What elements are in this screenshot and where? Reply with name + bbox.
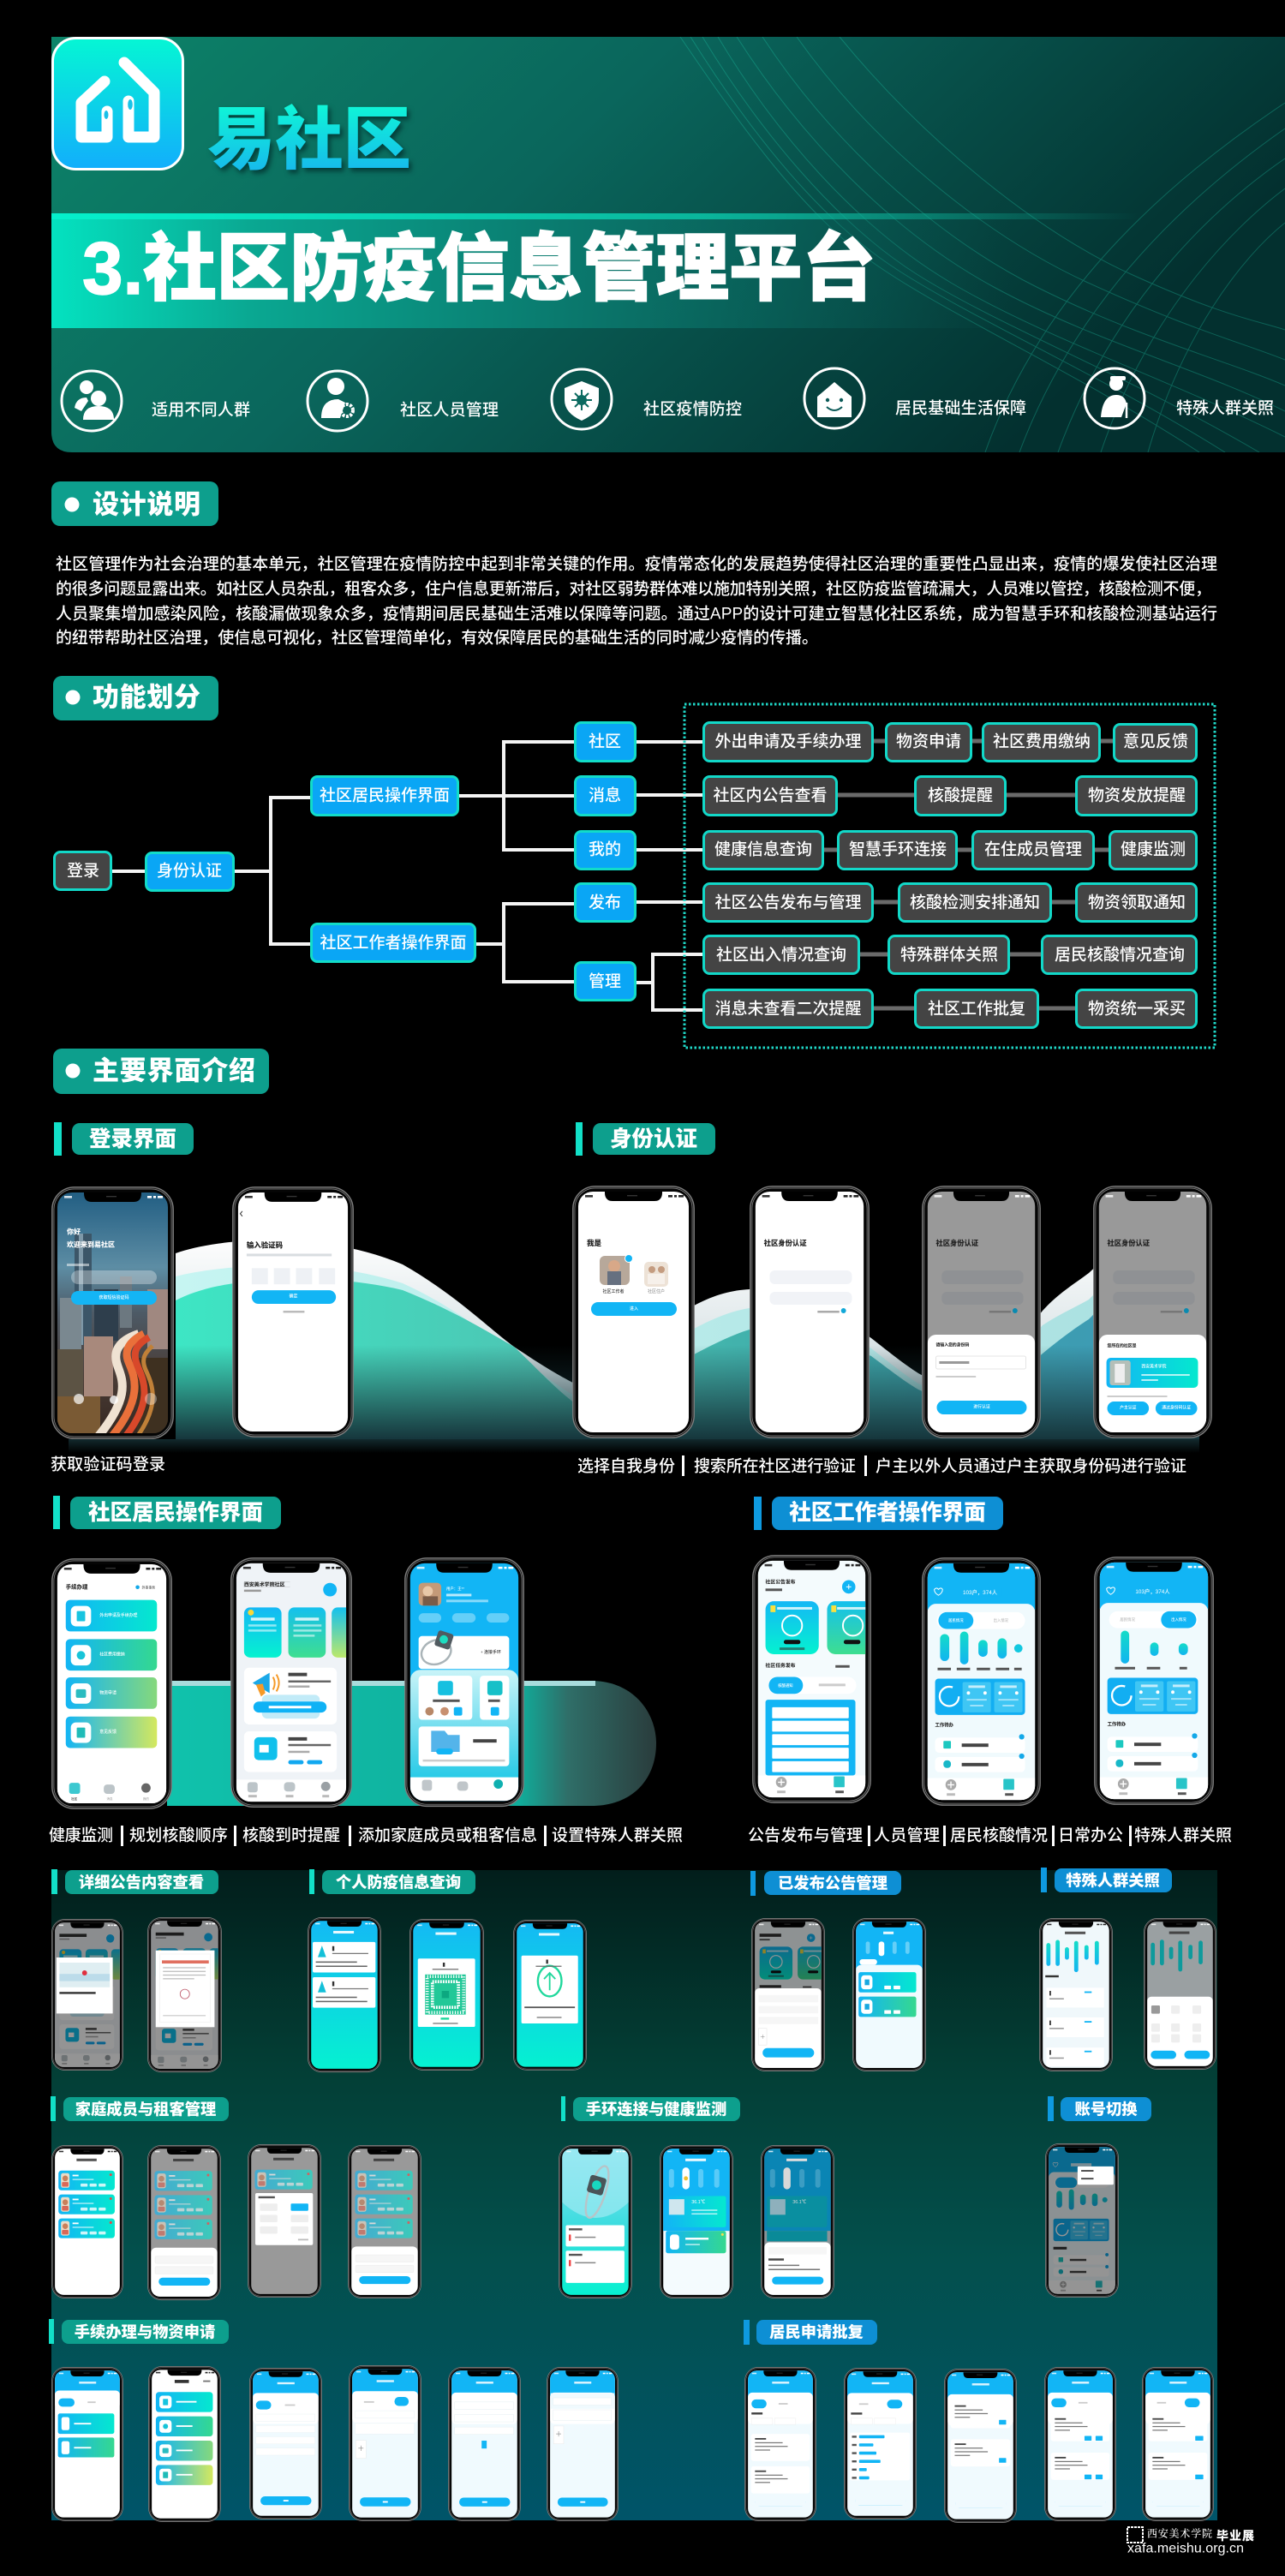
caption: resident features: 添加家庭成员或租客信息 xyxy=(358,1826,537,1845)
leaf row 5: 居民核酸情况查询 xyxy=(1055,946,1185,965)
caption: login: 获取验证码登录 xyxy=(51,1455,165,1473)
phone: access stats: 工作待办 xyxy=(1108,1721,1127,1728)
node: community xyxy=(576,723,636,761)
phone: approval list xyxy=(744,2367,816,2521)
hero banner xyxy=(51,37,1285,452)
phone: travel card xyxy=(513,1920,587,2071)
caption: worker features xyxy=(748,1826,1232,1846)
subheading: identity xyxy=(576,1122,715,1156)
phone: publish: 社区任务发布 xyxy=(766,1662,796,1669)
phone: verification code xyxy=(232,1186,354,1437)
feature: epidemic control xyxy=(552,369,742,429)
resident band background xyxy=(167,1681,656,1806)
phone: application types xyxy=(51,2367,123,2521)
subheading: resident interface: 社区居民操作界面 xyxy=(88,1500,263,1525)
node: identity verification xyxy=(146,853,233,891)
phone: identity code sheet: 进行认证 xyxy=(973,1403,990,1410)
phone: residents stats: 居民情况 xyxy=(948,1617,964,1623)
phone: procedures list: 手续办理 xyxy=(66,1582,88,1590)
phone: bracelet connect xyxy=(559,2145,632,2298)
caption: resident features: 核酸到时提醒 xyxy=(242,1826,340,1845)
design description paragraph xyxy=(56,555,1217,648)
dotted leaf frame xyxy=(684,704,1215,1048)
phone: access stats xyxy=(1094,1557,1214,1805)
phone: my profile: + 连接手环 xyxy=(481,1649,501,1655)
heading: function division: 功能划分 xyxy=(93,682,200,713)
phone: my profile xyxy=(404,1557,524,1807)
phone: procedures list: 意见反馈 xyxy=(99,1729,117,1735)
lower panel background xyxy=(51,1870,1217,2520)
leaf row 3: 健康监测 xyxy=(1121,840,1186,858)
caption: worker features: 特殊人群关照 xyxy=(1134,1826,1232,1845)
leaf row 4: 核酸检测安排通知 xyxy=(910,893,1040,911)
phone: QR code xyxy=(409,1919,484,2071)
leaf row 1 xyxy=(704,723,1196,761)
leaf row 1: 物资申请 xyxy=(896,732,961,750)
phone: role selection: 社区工作者 xyxy=(602,1288,625,1294)
grey connectors between leaf nodes xyxy=(824,741,1113,1008)
node: manage xyxy=(576,963,636,1001)
design description paragraph: 的纽带帮助社区治理，使信息可视化，社区管理简单化，有效保障居民的基础生活的同时减少疫情的传播。 xyxy=(56,629,818,648)
phone: role selection xyxy=(572,1186,695,1438)
node: login xyxy=(55,852,111,889)
phone: access stats: 居民情况 xyxy=(1120,1617,1136,1623)
watermark: 毕业展 xyxy=(1216,2529,1254,2543)
subheading: notice details xyxy=(51,1869,218,1894)
feature: special groups: 特殊人群关照 xyxy=(1176,399,1274,418)
phone: procedures list xyxy=(51,1558,172,1809)
design description paragraph: 的很多问题显露出来。如社区人员杂乱，租客众多，住户信息更新滞后，对社区弱势群体难以施加特别关照，社区防疫监管疏漏大，人员难以管控，核酸检测不便， xyxy=(56,579,1211,598)
leaf row 5 xyxy=(704,935,1196,973)
phone: notice document popup xyxy=(147,1917,225,2072)
node: identity verification: 身份认证 xyxy=(157,862,222,881)
leaf row 4: 物资领取通知 xyxy=(1088,893,1186,911)
leaf row 6: 消息未查看二次提醒 xyxy=(714,999,862,1018)
leaf row 5: 社区出入情况查询 xyxy=(716,946,846,965)
phone: community result sheet: 西安美术学院 xyxy=(1141,1363,1167,1370)
subheading: special care xyxy=(1041,1868,1172,1892)
leaf row 6: 社区工作批复 xyxy=(928,999,1025,1018)
phone: upload form xyxy=(349,2365,421,2521)
phone: publish form sheet xyxy=(751,1918,828,2071)
subheading: special care: 特殊人群关照 xyxy=(1066,1871,1160,1890)
node: community: 社区 xyxy=(589,732,621,750)
phone: procedures list: 外事事务 xyxy=(142,1585,155,1589)
subheading: identity: 身份认证 xyxy=(610,1127,697,1151)
leaf row 1: 意见反馈 xyxy=(1123,732,1188,750)
phone: procedures list: 物资申请 xyxy=(99,1689,117,1695)
leaf row 3 xyxy=(704,831,1196,869)
phone: community result sheet: 户主认证 xyxy=(1120,1404,1137,1411)
phone: my profile: 用户：王** xyxy=(446,1586,464,1592)
subheading: notice details: 详细公告内容查看 xyxy=(79,1873,204,1892)
phone: publish: 社区公告发布 xyxy=(766,1578,796,1585)
subheading: worker interface xyxy=(754,1497,1003,1530)
subheading: account switch: 账号切换 xyxy=(1074,2101,1138,2118)
node: mine xyxy=(576,831,636,869)
leaf row 1: 外出申请及手续办理 xyxy=(714,732,862,750)
caption: identity: 户主以外人员通过户主获取身份码进行验证 xyxy=(876,1456,1186,1475)
phone: identity code sheet: 社区身份认证 xyxy=(936,1239,979,1247)
caption: worker features: 公告发布与管理 xyxy=(748,1826,863,1845)
caption: worker features: 人员管理 xyxy=(874,1826,940,1845)
phone: survey bars xyxy=(844,2368,917,2519)
leaf row 2 xyxy=(704,776,1196,816)
phone: access stats: 出入情况 xyxy=(1171,1617,1186,1623)
caption: identity: 搜索所在社区进行验证 xyxy=(694,1456,856,1475)
phone: community result sheet: 通过身份码认证 xyxy=(1162,1404,1191,1411)
node: login: 登录 xyxy=(67,862,99,881)
feature: special groups xyxy=(1085,368,1274,428)
phone: notice map popup xyxy=(51,1919,126,2071)
phone: material cards xyxy=(148,2366,221,2522)
phone: residents stats: 103户，374人 xyxy=(963,1588,998,1596)
phone: feedback form xyxy=(547,2367,619,2521)
feature: basic living support: 居民基础生活保障 xyxy=(895,399,1026,418)
caption: identity: 选择自我身份 xyxy=(577,1456,675,1475)
leaf row 3: 在住成员管理 xyxy=(984,840,1082,858)
feature: different groups xyxy=(62,371,250,431)
node: mine: 我的 xyxy=(589,840,621,858)
phone: procedures list: 外出申请及手续办理 xyxy=(99,1612,138,1618)
leaf row 5: 特殊群体关照 xyxy=(900,946,998,965)
subheading: family members xyxy=(51,2096,229,2121)
caption: worker features: 日常办公 xyxy=(1058,1826,1123,1845)
feature: different groups: 适用不同人群 xyxy=(152,401,250,420)
phone: approve with two actions xyxy=(1044,2367,1116,2521)
node: worker interface xyxy=(312,923,475,961)
leaf row 6 xyxy=(704,990,1196,1028)
heading: design notes: 设计说明 xyxy=(93,490,200,519)
phone: login screen xyxy=(51,1186,174,1439)
subheading: account switch xyxy=(1048,2096,1151,2121)
phone: community verification xyxy=(750,1186,870,1438)
leaf row 4 xyxy=(704,884,1196,922)
subheading: bracelet health xyxy=(561,2096,740,2121)
phone: fee form xyxy=(448,2367,521,2521)
leaf row 3: 健康信息查询 xyxy=(714,840,812,858)
phone: procedures list: 消息 xyxy=(106,1796,113,1801)
leaf row 4: 社区公告发布与管理 xyxy=(714,893,862,911)
leaf row 1: 社区费用缴纳 xyxy=(993,732,1091,750)
phone: identity code sheet xyxy=(922,1186,1041,1442)
subheading: login xyxy=(54,1122,194,1156)
subheading: family members: 家庭成员与租客管理 xyxy=(75,2101,216,2118)
phone: health code list xyxy=(308,1917,381,2072)
caption: resident features: 健康监测 xyxy=(49,1826,113,1845)
phone: verification code: 确定 xyxy=(290,1294,297,1300)
phone: residents stats: 工作待办 xyxy=(935,1722,954,1729)
phone: add tenant xyxy=(348,2145,421,2298)
background wave hills xyxy=(69,1199,1199,1453)
subheading: login: 登录界面 xyxy=(89,1127,176,1151)
phone: role selection: 我是 xyxy=(587,1239,602,1247)
phone: role selection: 社区住户 xyxy=(648,1288,665,1294)
subheading: personal info: 个人防疫信息查询 xyxy=(336,1873,461,1892)
phone: community verification: 社区身份认证 xyxy=(764,1239,807,1247)
phone: application form xyxy=(249,2368,322,2519)
phone: publish: 核酸通知 xyxy=(778,1682,793,1688)
node: manage: 管理 xyxy=(589,971,621,990)
caption: worker features: 居民核酸情况 xyxy=(950,1826,1048,1845)
phone: identity code sheet: 请输入您的身份码 xyxy=(936,1342,969,1348)
leaf row 2: 物资发放提醒 xyxy=(1088,786,1186,805)
phone: role selection: 进入 xyxy=(630,1306,638,1312)
caption: identity xyxy=(577,1455,1186,1476)
brand name: 易社区 xyxy=(207,101,411,178)
node: worker interface: 社区工作者操作界面 xyxy=(320,934,467,953)
phone: special care list xyxy=(1039,1918,1113,2071)
design description paragraph: 社区管理作为社会治理的基本单元，社区管理在疫情防控中起到非常关键的作用。疫情常态化的发展趋势使得社区治理的重要性凸显出来，疫情的爆发使社区治理 xyxy=(56,555,1217,574)
subheading: personal info xyxy=(309,1869,475,1894)
phone: health monitor: 36.1℃ xyxy=(691,2199,706,2205)
node: messages xyxy=(576,776,636,816)
phone: review requests xyxy=(944,2369,1017,2523)
caption: resident features: 设置特殊人群关照 xyxy=(552,1826,683,1845)
phone: publish xyxy=(752,1555,877,1803)
logo icon xyxy=(53,38,183,170)
phone: community result sheet: 您所在的社区是 xyxy=(1108,1342,1137,1349)
phone: family list xyxy=(51,2145,123,2298)
node: resident interface: 社区居民操作界面 xyxy=(320,786,450,805)
leaf row 6: 物资统一采买 xyxy=(1088,999,1186,1018)
leaf row 2: 社区内公告查看 xyxy=(713,786,828,805)
node: publish: 发布 xyxy=(589,893,621,911)
subheading: published notices xyxy=(750,1871,901,1896)
phone: login screen: 获取短信验证码 xyxy=(99,1294,129,1300)
node: resident interface xyxy=(312,776,457,816)
phone: member dialog xyxy=(248,2144,321,2298)
node: messages: 消息 xyxy=(589,786,621,805)
feature: staff management xyxy=(308,371,499,431)
phone: health sheet xyxy=(761,2145,834,2298)
phone: add family member xyxy=(147,2145,221,2300)
phone: procedures list: 社区 xyxy=(71,1796,78,1801)
tree connector lines xyxy=(111,742,702,1010)
subheading: worker interface: 社区工作者操作界面 xyxy=(789,1500,986,1525)
subheading: published notices: 已发布公告管理 xyxy=(778,1874,888,1892)
feature: basic living support xyxy=(804,368,1026,428)
phone: community result sheet xyxy=(1093,1186,1212,1442)
subheading: bracelet health: 手环连接与健康监测 xyxy=(586,2101,726,2118)
phone: special care filter xyxy=(1144,1918,1216,2070)
subheading: resident interface xyxy=(53,1496,281,1529)
phone: community result sheet: 社区身份认证 xyxy=(1108,1239,1151,1247)
phone: procedures list: 社区费用缴纳 xyxy=(99,1652,125,1658)
phone: approve with one action xyxy=(1142,2367,1214,2521)
phone: verification code: 输入验证码 xyxy=(247,1241,284,1250)
subheading: approval xyxy=(744,2320,877,2345)
subheading: procedures: 手续办理与物资申请 xyxy=(75,2323,215,2340)
design description paragraph: 人员聚集增加感染风险，核酸漏做现象众多，疫情期间居民基础生活难以保障等问题。通过APP的设计可建立智慧化社区系统，成为智慧手环和核酸检测基站运行 xyxy=(56,605,1217,624)
phone: messages xyxy=(230,1557,357,1808)
caption: resident features xyxy=(49,1826,683,1846)
heading: main interfaces xyxy=(53,1049,269,1094)
watermark: 西安美术学院 xyxy=(1147,2525,1212,2541)
phone: residents stats: 出入情况 xyxy=(994,1617,1009,1623)
heading: design notes xyxy=(51,481,218,526)
phone: procedures list: 我的 xyxy=(143,1796,149,1801)
feature: epidemic control: 社区疫情防控 xyxy=(643,399,742,418)
phone: health monitor xyxy=(660,2145,733,2298)
leaf row 3: 智慧手环连接 xyxy=(849,840,947,858)
phone: login screen: 欢迎来到易社区 xyxy=(67,1240,115,1249)
phone: published list xyxy=(852,1918,926,2071)
function tree diagram xyxy=(55,704,1215,1048)
phone: residents stats xyxy=(922,1557,1041,1806)
caption: resident features: 规划核酸顺序 xyxy=(129,1826,228,1845)
heading: function division xyxy=(53,676,218,720)
phone: login screen: 你好 xyxy=(67,1227,81,1235)
subheading: approval: 居民申请批复 xyxy=(769,2323,864,2340)
watermark xyxy=(1127,2525,1254,2556)
heading: main interfaces: 主要界面介绍 xyxy=(93,1055,255,1086)
phone: access stats: 103户，374人 xyxy=(1135,1587,1170,1595)
feature: staff management: 社区人员管理 xyxy=(400,401,499,420)
subheading: procedures xyxy=(49,2319,229,2344)
leaf row 2: 核酸提醒 xyxy=(928,786,993,805)
node: publish xyxy=(576,884,636,922)
main title: 3.社区防疫信息管理平台 xyxy=(82,228,876,310)
phone: health sheet: 36.1℃ xyxy=(792,2199,807,2205)
watermark: xafa.meishu.org.cn xyxy=(1127,2541,1244,2556)
phone: account switch xyxy=(1045,2143,1119,2298)
phone: messages: 西安美术学院社区 xyxy=(244,1581,285,1588)
